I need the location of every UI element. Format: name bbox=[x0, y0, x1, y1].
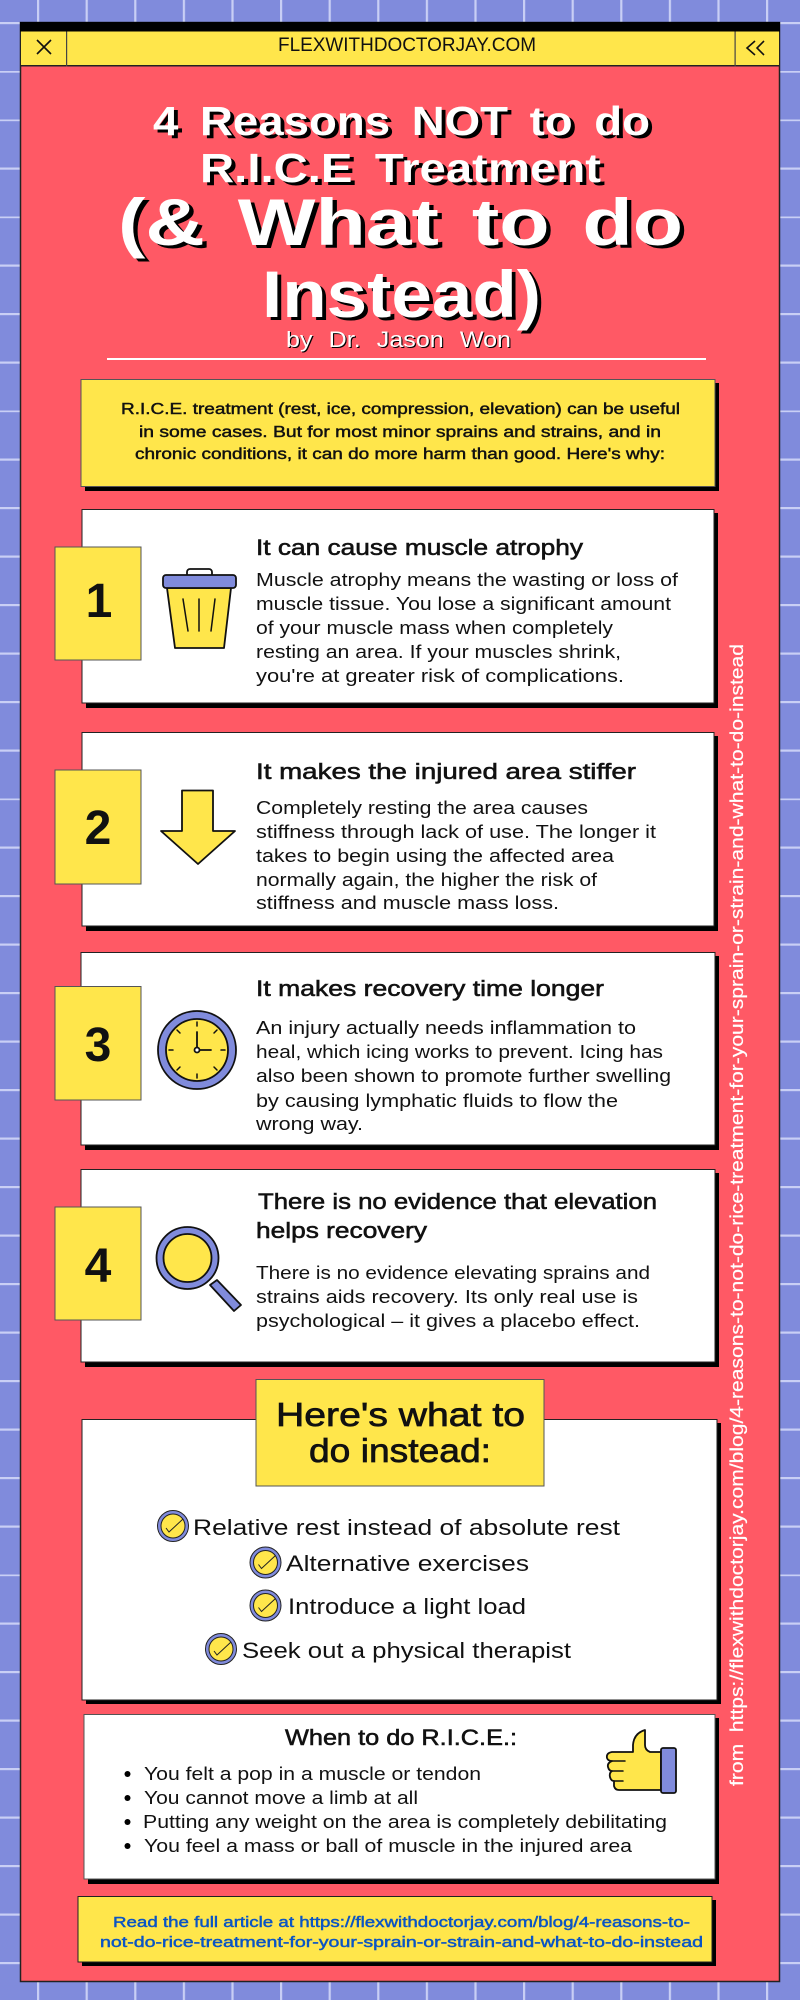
section heading bbox=[256, 1380, 544, 1486]
body text: you're at greater risk of complications. bbox=[256, 665, 624, 686]
heading: It can cause muscle atrophy bbox=[256, 535, 583, 560]
item: physical therapist bbox=[206, 1634, 571, 1664]
icon: magnifying glass bbox=[156, 1227, 241, 1311]
body text: psychological – it gives a placebo effect. bbox=[256, 1310, 640, 1331]
intro callout bbox=[81, 380, 719, 491]
body text: resting an area. If your muscles shrink, bbox=[256, 641, 621, 662]
panel: reason 2 bbox=[55, 732, 718, 931]
heading: There is no evidence that elevation bbox=[258, 1189, 657, 1214]
heading bbox=[256, 1189, 657, 1243]
icon: close bbox=[37, 40, 51, 54]
site name: FLEXWITHDOCTORJAY.COM bbox=[278, 35, 536, 56]
item: alternative exercises bbox=[250, 1547, 529, 1578]
body text: strains aids recovery. Its only real use is bbox=[256, 1286, 638, 1307]
bullet list bbox=[124, 1763, 667, 1856]
number 1 bbox=[55, 547, 141, 660]
heading: It makes the injured area stiffer bbox=[256, 759, 636, 784]
footer callout: article link bbox=[78, 1896, 716, 1966]
bullet list: You cannot move a limb at all bbox=[144, 1787, 418, 1808]
item: relative rest bbox=[158, 1510, 620, 1542]
body text bbox=[255, 1017, 671, 1134]
icon: clock bbox=[158, 1011, 236, 1089]
panel: when to do R.I.C.E. bbox=[84, 1714, 719, 1884]
bullet list: You felt a pop in a muscle or tendon bbox=[144, 1763, 481, 1784]
body text: muscle tissue. You lose a significant amount bbox=[256, 593, 671, 614]
body text: normally again, the higher the risk of bbox=[256, 869, 598, 890]
body text: by causing lymphatic fluids to flow the bbox=[256, 1090, 618, 1111]
bullet list: Putting any weight on the area is completely debilitating bbox=[143, 1811, 667, 1832]
item: relative rest: Relative rest instead of absolute rest bbox=[193, 1515, 620, 1540]
title: Instead) bbox=[262, 257, 541, 331]
body text: wrong way. bbox=[255, 1113, 363, 1134]
title: R.I.C.E Treatment bbox=[200, 145, 601, 191]
number 4: 4 bbox=[85, 1240, 112, 1293]
icon: double chevron bbox=[747, 41, 764, 55]
footer callout: article link: Read the full article at https://flexwithdoctorjay.com/blog/4-reasons-to- bbox=[113, 1915, 690, 1931]
intro callout: in some cases. But for most minor sprains and strains, and in bbox=[139, 424, 661, 441]
body text: takes to begin using the affected area bbox=[256, 845, 615, 866]
number 2: 2 bbox=[85, 802, 111, 855]
panel: reason 3 bbox=[55, 952, 719, 1150]
bullet list: You feel a mass or ball of muscle in the injured area bbox=[144, 1835, 633, 1856]
icon: down arrow bbox=[161, 790, 235, 864]
number 1: 1 bbox=[86, 575, 112, 628]
body text: heal, which icing works to prevent. Icing has bbox=[256, 1041, 663, 1062]
number 4 bbox=[55, 1207, 141, 1320]
body text: stiffness and muscle mass loss. bbox=[256, 892, 559, 913]
item: light load bbox=[250, 1590, 526, 1621]
panel: reason 4 bbox=[55, 1170, 719, 1367]
panel: what to do instead bbox=[82, 1380, 721, 1704]
body text: There is no evidence elevating sprains and bbox=[256, 1262, 650, 1283]
item: physical therapist: Seek out a physical therapist bbox=[242, 1638, 571, 1663]
body text: Completely resting the area causes bbox=[256, 797, 588, 818]
heading: helps recovery bbox=[256, 1218, 427, 1243]
number 3: 3 bbox=[85, 1019, 111, 1072]
body text: of your muscle mass when completely bbox=[256, 617, 614, 638]
body text: stiffness through lack of use. The longer it bbox=[256, 821, 656, 842]
title bbox=[118, 98, 683, 331]
byline: by Dr. Jason Won bbox=[286, 327, 511, 352]
heading: When to do R.I.C.E.: bbox=[285, 1725, 517, 1750]
body text bbox=[256, 1262, 650, 1331]
intro callout: chronic conditions, it can do more harm than good. Here's why: bbox=[135, 446, 665, 463]
section heading: Here's what to bbox=[276, 1396, 525, 1433]
body text bbox=[256, 569, 679, 686]
body text: also been shown to promote further swelling bbox=[256, 1065, 671, 1086]
heading: It makes recovery time longer bbox=[256, 976, 604, 1001]
panel: reason 1 bbox=[55, 510, 718, 708]
item: light load: Introduce a light load bbox=[288, 1594, 526, 1619]
icon: trash can bbox=[163, 569, 236, 648]
icon: thumbs up bbox=[607, 1730, 676, 1793]
section heading: do instead: bbox=[309, 1432, 491, 1469]
number 3 bbox=[55, 986, 141, 1100]
title: (& What to do bbox=[118, 185, 683, 259]
body text: Muscle atrophy means the wasting or loss of bbox=[256, 569, 679, 590]
header bar bbox=[20, 22, 780, 66]
intro callout: R.I.C.E. treatment (rest, ice, compression, elevation) can be useful bbox=[121, 401, 680, 418]
title: 4 Reasons NOT to do bbox=[153, 98, 650, 144]
vertical source URL: from https://flexwithdoctorjay.com/blog/4-reasons-to-not-do-rice-treatment-for-your-sprain-or-strain-and-what-to-do-instead bbox=[727, 644, 747, 1786]
body text: An injury actually needs inflammation to bbox=[256, 1017, 636, 1038]
footer callout: article link: not-do-rice-treatment-for-your-sprain-or-strain-and-what-to-do-instead bbox=[100, 1935, 703, 1951]
body text bbox=[256, 797, 656, 913]
number 2 bbox=[55, 770, 141, 884]
item: alternative exercises: Alternative exercises bbox=[286, 1551, 529, 1576]
